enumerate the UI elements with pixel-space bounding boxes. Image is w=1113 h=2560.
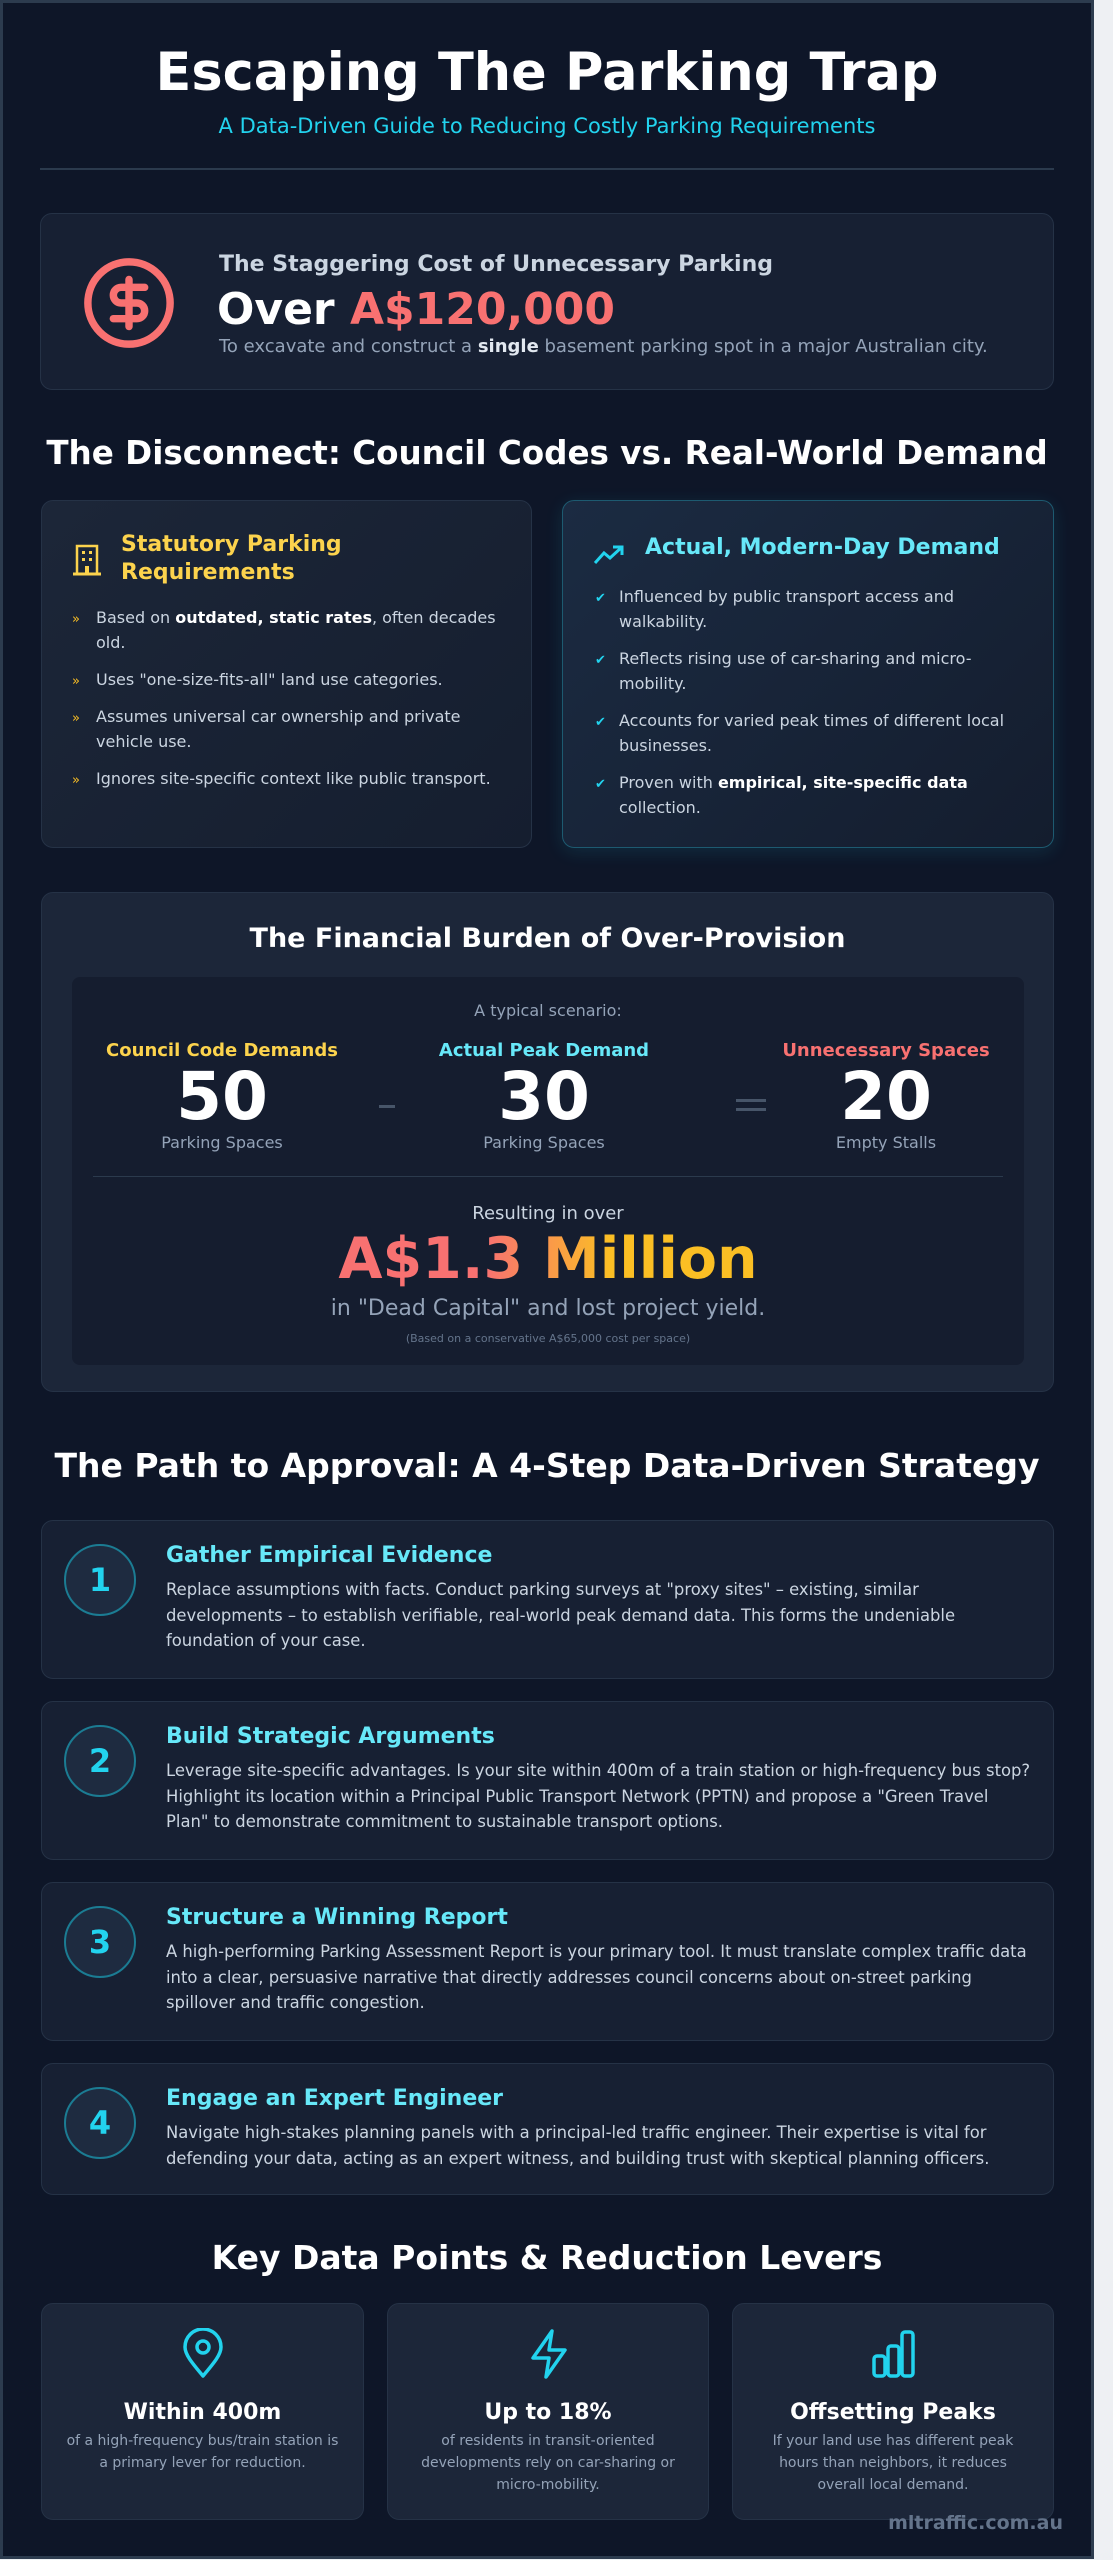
list: statutory points: Uses "one-size-fits-all" land use categories. xyxy=(96,670,443,689)
panel: statutory requirements: » xyxy=(72,612,80,627)
step 1: 1 xyxy=(89,1561,111,1599)
result text: (Based on a conservative A$65,000 cost per space) xyxy=(406,1332,690,1345)
panel: statutory requirements xyxy=(41,500,532,848)
panel: actual demand: ✔ xyxy=(595,777,606,792)
card: up to 18% xyxy=(387,2303,709,2520)
step 1: Replace assumptions with facts. Conduct parking surveys at "proxy sites" – existing, similar developments – to establish verifiable, real-world peak demand data. This forms the undeniable foundation of your case. xyxy=(166,1580,955,1650)
panel: statutory requirements: » xyxy=(72,773,80,788)
list: statutory points: Ignores site-specific context like public transport. xyxy=(96,769,491,788)
card: offsetting peaks: Offsetting Peaks xyxy=(790,2400,996,2425)
watermark: mltraffic.com.au xyxy=(888,2512,1063,2534)
step 2: Leverage site-specific advantages. Is your site within 400m of a train station or high-frequency bus stop? Highlight its location within a Principal Public Transport Network (PPTN) and propose a "Green Travel xyxy=(166,1761,1030,1806)
column: actual peak xyxy=(439,1040,649,1152)
list: actual points xyxy=(595,587,1004,817)
heading: path to approval: The Path to Approval: A 4-Step Data-Driven Strategy xyxy=(54,1446,1040,1485)
list: actual points: Accounts for varied peak times of different local businesses. xyxy=(619,711,1004,755)
column: actual peak: 30 xyxy=(498,1058,590,1135)
column: unnecessary xyxy=(782,1040,990,1152)
panel: actual demand: ✔ xyxy=(595,591,606,606)
column: council code xyxy=(106,1040,338,1152)
list: actual points: Proven with empirical, site-specific data collection. xyxy=(619,773,968,817)
list: statutory points: Assumes universal car ownership and private vehicle use. xyxy=(96,707,461,751)
card: within 400m: of a high-frequency bus/train station is a primary lever for reduction. xyxy=(67,2433,338,2471)
column: unnecessary: Empty Stalls xyxy=(836,1133,936,1152)
icon: building xyxy=(73,544,101,576)
operator: minus xyxy=(379,1105,395,1108)
operator: equals xyxy=(736,1099,766,1111)
column: actual peak: Actual Peak Demand xyxy=(439,1040,649,1061)
card: within 400m xyxy=(41,2303,364,2520)
step 1: Gather Empirical Evidence xyxy=(166,1543,492,1568)
step 3: 3 xyxy=(89,1923,111,1961)
card: within 400m: Within 400m xyxy=(124,2400,281,2425)
card: offsetting peaks xyxy=(732,2303,1054,2520)
icon: bar chart xyxy=(872,2330,915,2378)
list: statutory points: Based on outdated, static rates, often decades old. xyxy=(96,608,496,652)
heading: statutory xyxy=(121,532,342,585)
step 4: Navigate high-stakes planning panels with a principal-led traffic engineer. Their expertise is vital for defending your data, acting as an expert witness, and building trust with skeptical planning officers. xyxy=(166,2123,989,2168)
icon: trending up xyxy=(594,546,624,564)
heading: statutory: Requirements xyxy=(121,560,295,585)
panel: actual demand xyxy=(562,500,1054,848)
step 2: 2 xyxy=(89,1742,111,1780)
step 3 xyxy=(41,1882,1054,2041)
column: unnecessary: 20 xyxy=(840,1058,932,1135)
icon: dollar circle xyxy=(84,258,174,348)
title: Escaping The Parking Trap xyxy=(155,42,938,103)
panel: financial burden xyxy=(41,892,1054,1392)
heading: statutory: Statutory Parking xyxy=(121,532,342,557)
result text xyxy=(331,1203,765,1345)
big cost number: Over A$120,000 xyxy=(217,284,615,335)
panel: statutory requirements: » xyxy=(72,711,80,726)
heading: financial burden: The Financial Burden of Over-Provision xyxy=(250,923,845,954)
step 4: Engage an Expert Engineer xyxy=(166,2086,503,2111)
cost heading: The Staggering Cost of Unnecessary Parking xyxy=(219,252,773,277)
step 3: A high-performing Parking Assessment Report is your primary tool. It must translate complex traffic data into a clear, persuasive narrative that directly addresses council concerns about on-street parking spillover and traffic congestion. xyxy=(166,1942,1027,2012)
heading: disconnect: The Disconnect: Council Codes vs. Real-World Demand xyxy=(46,434,1048,472)
heading: key data points: Key Data Points & Reduction Levers xyxy=(212,2238,882,2277)
card: offsetting peaks: If your land use has different peak hours than neighbors, it reduces overall local demand. xyxy=(773,2433,1013,2493)
icon: lightning xyxy=(531,2329,567,2379)
panel: actual demand: ✔ xyxy=(595,653,606,668)
list: actual points: Influenced by public transport access and walkability. xyxy=(619,587,954,631)
card: up to 18%: Up to 18% xyxy=(484,2400,612,2425)
column: council code: Council Code Demands xyxy=(106,1040,338,1061)
result text: in "Dead Capital" and lost project yield. xyxy=(331,1296,765,1321)
result text: A$1.3 Million xyxy=(338,1226,758,1292)
step 3: Structure a Winning Report xyxy=(166,1905,508,1930)
list: statutory points xyxy=(72,608,496,788)
scenario caption: A typical scenario: xyxy=(474,1001,622,1020)
column: actual peak: Parking Spaces xyxy=(483,1133,605,1152)
panel: actual demand: ✔ xyxy=(595,715,606,730)
column: council code: Parking Spaces xyxy=(161,1133,283,1152)
icon: map pin xyxy=(183,2328,223,2378)
step 1 xyxy=(41,1520,1054,1679)
subtitle: A Data-Driven Guide to Reducing Costly Parking Requirements xyxy=(219,114,875,138)
panel: cost highlight xyxy=(40,213,1054,390)
list: actual points: Reflects rising use of car-sharing and micro-mobility. xyxy=(619,649,971,693)
column: council code: 50 xyxy=(176,1058,268,1135)
step 2: Build Strategic Arguments xyxy=(166,1724,495,1749)
card: up to 18%: of residents in transit-oriented developments rely on car-sharing or micro-mobility. xyxy=(421,2433,675,2493)
step 2 xyxy=(41,1701,1054,1860)
cost caption: To excavate and construct a single basement parking spot in a major Australian city. xyxy=(219,336,988,357)
step 4 xyxy=(41,2063,1054,2195)
column: unnecessary: Unnecessary Spaces xyxy=(782,1040,990,1061)
panel: statutory requirements: » xyxy=(72,674,80,689)
heading: actual demand: Actual, Modern-Day Demand xyxy=(645,535,1000,560)
result text: Resulting in over xyxy=(472,1203,624,1224)
scenario box xyxy=(72,977,1024,1365)
step 4: 4 xyxy=(89,2104,111,2142)
step 2: Plan" to demonstrate commitment to sustainable transport options. xyxy=(166,1812,723,1831)
